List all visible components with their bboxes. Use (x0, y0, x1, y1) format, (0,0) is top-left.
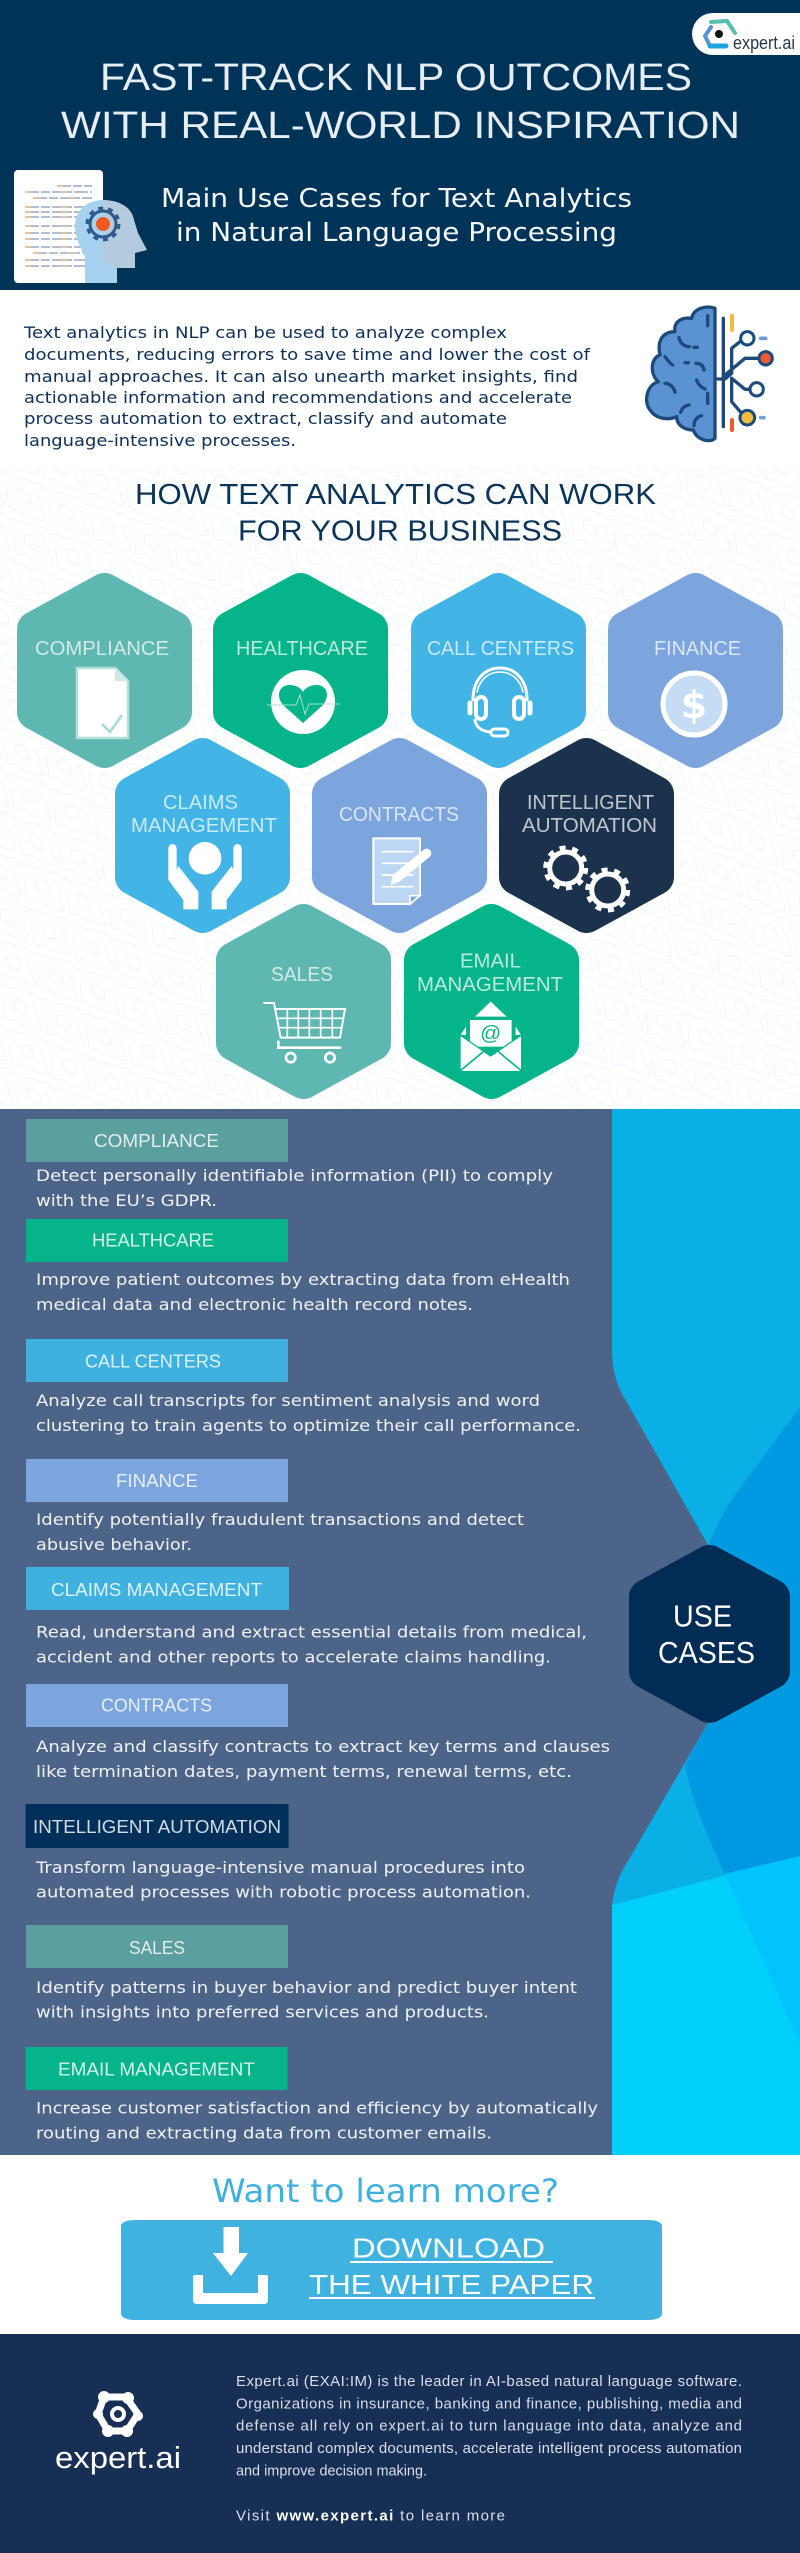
about text: defense all rely on expert.ai to turn language into data, analyze and (236, 2418, 742, 2435)
expert.ai logo: expert.ai (55, 2440, 181, 2475)
hexagon: call centers: CALL CENTERS (427, 638, 574, 660)
button label (309, 2233, 595, 2300)
intro paragraph: language-intensive processes. (24, 431, 296, 450)
use case: intelligent automation: INTELLIGENT AUTOMATION (33, 1817, 281, 1837)
use case: healthcare: medical data and electronic health record notes. (36, 1295, 473, 1314)
use case: compliance: COMPLIANCE (94, 1131, 219, 1151)
hexagon: use cases: CASES (658, 1635, 755, 1670)
logo pill: expert.ai (692, 13, 800, 55)
about text (236, 2373, 742, 2525)
use case: sales: with insights into preferred services and products. (36, 2002, 489, 2022)
call to action heading: Want to learn more? (212, 2172, 559, 2210)
use case: finance (26, 1459, 524, 1554)
use case: contracts: Analyze and classify contracts to extract key terms and clauses (36, 1737, 610, 1756)
use case: intelligent automation (26, 1804, 531, 1902)
use case: finance: FINANCE (116, 1471, 198, 1491)
button label: THE WHITE PAPER (309, 2269, 594, 2300)
intro paragraph: actionable information and recommendations and accelerate (24, 388, 572, 407)
hexagon: finance: $ (681, 683, 707, 727)
use case: email management: EMAIL MANAGEMENT (58, 2060, 255, 2080)
hexagon: call centers (427, 591, 574, 750)
use case: compliance (26, 1119, 553, 1210)
footer (0, 2334, 800, 2553)
title (61, 57, 740, 147)
use case: contracts (26, 1684, 610, 1781)
hexagon: finance: FINANCE (654, 638, 741, 660)
icon: document and head with gear (14, 170, 147, 283)
use case: claims management: accident and other reports to accelerate claims handling. (36, 1648, 551, 1666)
use case: sales: SALES (129, 1938, 185, 1958)
hexagon: compliance: COMPLIANCE (35, 638, 169, 660)
intro paragraph: process automation to extract, classify and automate (24, 409, 507, 428)
hexagon: intelligent automation: AUTOMATION (522, 815, 657, 837)
intro paragraph: documents, reducing errors to save time and lower the cost of (24, 345, 590, 364)
use case: healthcare (26, 1219, 570, 1314)
use case: compliance: with the EU’s GDPR. (36, 1191, 217, 1210)
use case: claims management (26, 1567, 587, 1666)
hexagon: finance (626, 591, 765, 750)
hexagon: claims management: MANAGEMENT (131, 815, 277, 837)
blue background shapes (612, 1109, 800, 2155)
use case: finance: Identify potentially fraudulent transactions and detect (36, 1510, 524, 1529)
intro paragraph: manual approaches. It can also unearth market insights, find (24, 367, 578, 386)
hexagon: healthcare (231, 591, 370, 750)
use case: contracts: CONTRACTS (101, 1696, 212, 1716)
hexagon: email management: MANAGEMENT (417, 974, 563, 996)
use case: claims management: CLAIMS MANAGEMENT (51, 1580, 262, 1600)
hexagon: email management (417, 922, 563, 1081)
panel: how text analytics can work (0, 467, 800, 1109)
hexagon: healthcare: HEALTHCARE (236, 638, 368, 660)
hexagon: use cases: USE (673, 1599, 732, 1634)
use case: call centers: clustering to train agents to optimize their call performance. (36, 1416, 581, 1435)
use case: compliance: Detect personally identifiable information (PII) to comply (36, 1166, 553, 1185)
intro paragraph (23, 323, 590, 450)
subtitle: Main Use Cases for Text Analytics (161, 184, 632, 214)
header band (0, 0, 800, 290)
heading: HOW TEXT ANALYTICS CAN WORK (135, 479, 657, 511)
use case: email management: routing and extracting data from customer emails. (36, 2124, 492, 2142)
use case: call centers: CALL CENTERS (85, 1352, 221, 1372)
about text: understand complex documents, accelerate intelligent process automation (236, 2440, 742, 2457)
use case: intelligent automation: automated processes with robotic process automation. (36, 1882, 531, 1902)
title: WITH REAL-WORLD INSPIRATION (61, 105, 740, 147)
use case: call centers: Analyze call transcripts for sentiment analysis and word (36, 1391, 540, 1410)
about text: Expert.ai (EXAI:IM) is the leader in AI-based natural language software. (236, 2373, 742, 2390)
subtitle (161, 184, 632, 248)
hexagon: intelligent automation: INTELLIGENT (527, 792, 654, 814)
panel: use cases (0, 1109, 800, 2155)
expert.ai logo (55, 2391, 181, 2475)
heading (135, 479, 657, 548)
use case: finance: abusive behavior. (36, 1535, 192, 1554)
hexagon: intelligent automation (517, 756, 657, 915)
title: FAST-TRACK NLP OUTCOMES (100, 57, 692, 99)
hexagon: email management: EMAIL (460, 950, 521, 972)
use case: email management (26, 2047, 598, 2142)
use case: sales: Identify patterns in buyer behavior and predict buyer intent (36, 1978, 577, 1997)
use case: healthcare: Improve patient outcomes by extracting data from eHealth (36, 1270, 570, 1289)
hexagon: sales (234, 922, 373, 1081)
use case: call centers (26, 1339, 581, 1435)
use case: contracts: like termination dates, payment terms, renewal terms, etc. (36, 1762, 572, 1781)
use case: healthcare: HEALTHCARE (92, 1231, 214, 1251)
hexagon: compliance (35, 591, 174, 750)
use case: intelligent automation: Transform language-intensive manual procedures into (35, 1858, 525, 1877)
icon: download arrow (193, 2227, 268, 2304)
use case: sales (26, 1925, 577, 2022)
hexagon: use cases (647, 1563, 772, 1705)
hexagon: claims management: CLAIMS (163, 792, 238, 814)
about text: and improve decision making. (236, 2463, 427, 2480)
intro paragraph: Text analytics in NLP can be used to analyze complex (23, 323, 507, 342)
about text: Organizations in insurance, banking and finance, publishing, media and (236, 2396, 742, 2413)
subtitle: in Natural Language Processing (176, 218, 617, 248)
heading: FOR YOUR BUSINESS (238, 516, 562, 548)
about text: Visit www.expert.ai to learn more (236, 2508, 505, 2525)
hexagon: sales: SALES (271, 964, 333, 986)
button label: DOWNLOAD (352, 2233, 545, 2264)
use case: email management: Increase customer satisfaction and efficiency by automatically (36, 2098, 598, 2118)
use case: claims management: Read, understand and extract essential details from medical, (36, 1622, 587, 1642)
hexagon: email management: @ (480, 1022, 501, 1045)
icon: brain with circuit (647, 307, 772, 441)
hexagon: claims management (131, 756, 277, 915)
logo pill: expert.ai: expert.ai (733, 33, 795, 53)
hexagon: contracts: CONTRACTS (339, 804, 459, 826)
download button (121, 2220, 662, 2320)
hexagon: contracts (330, 756, 469, 915)
